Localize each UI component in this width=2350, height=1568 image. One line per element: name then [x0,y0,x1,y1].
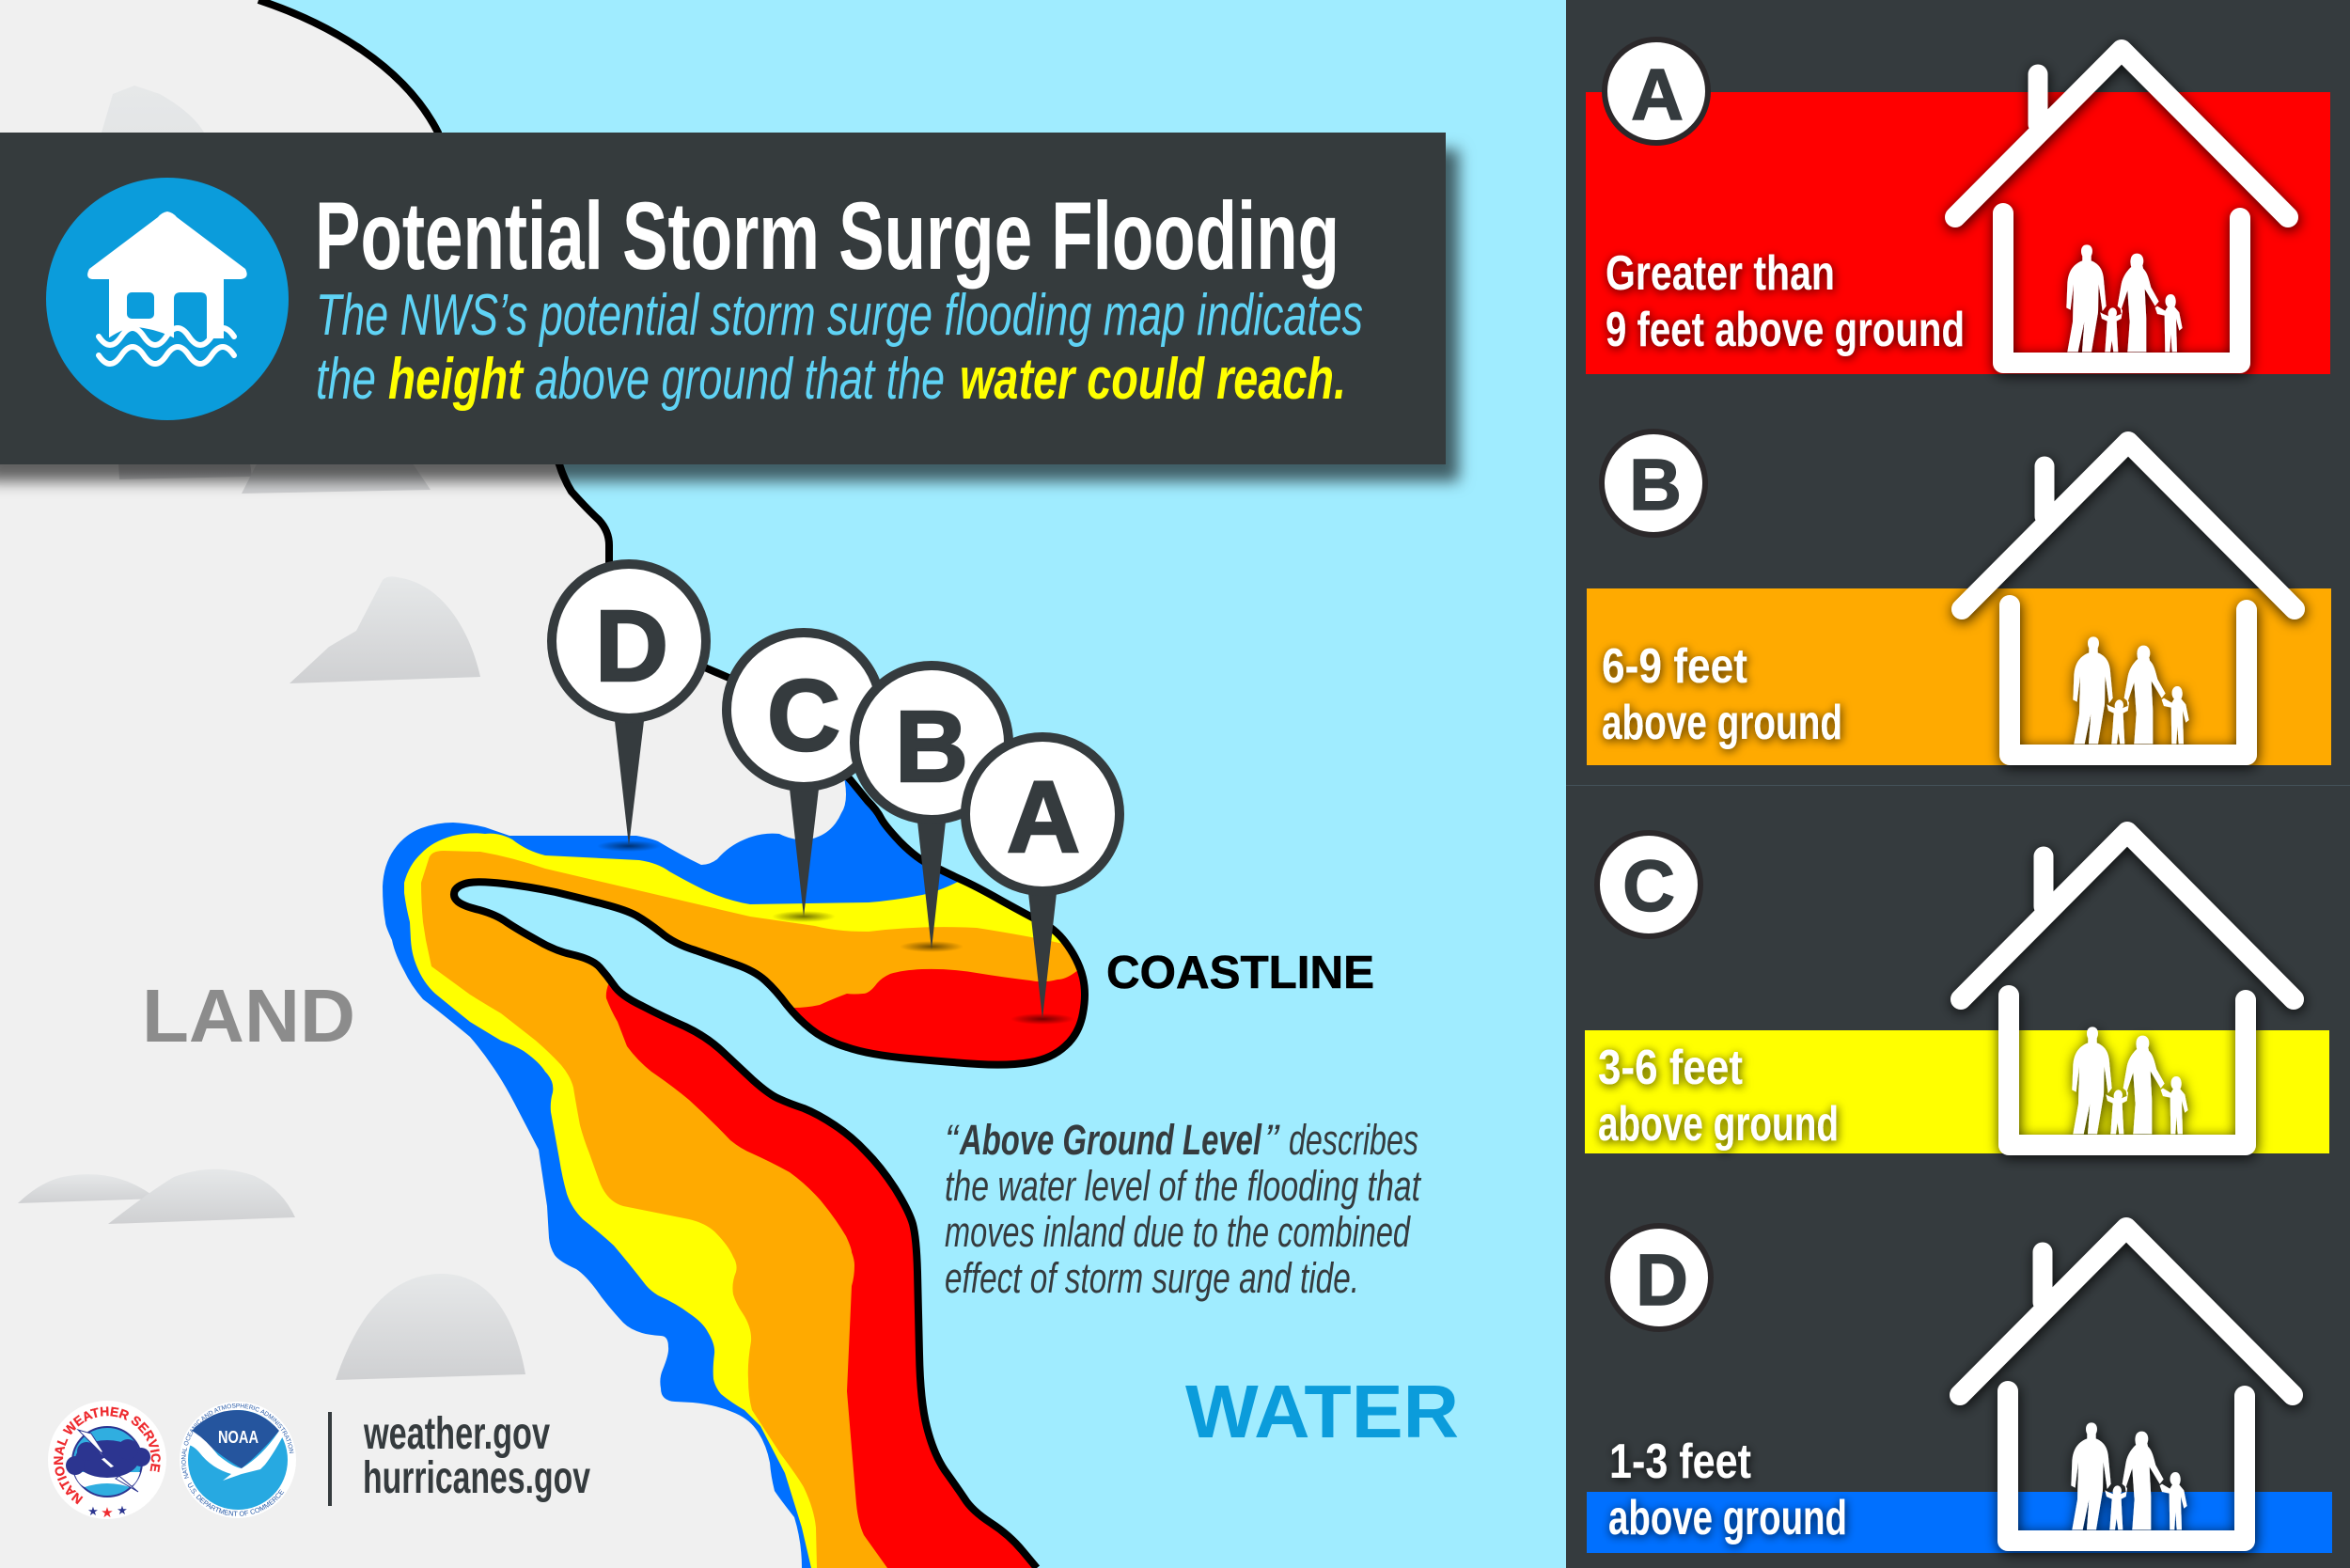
logo: NOAA: NATIONAL OCEANIC AND ATMOSPHERIC ADMINISTRATION [181,1403,293,1479]
legend D: 1-3 feet: 1-3 feet [1609,1435,1751,1489]
zone A: red lower band [605,983,1032,1568]
hills on land [18,86,525,1380]
text block: above ground level explanation: effect of storm surge and tide. [945,1254,1359,1302]
website links [328,1409,590,1506]
legend C: 3-6 feet [1585,832,2329,1153]
legend A: greater than 9 feet: 9 feet above ground [1606,303,1965,357]
website links: weather.gov [363,1409,550,1459]
subtitle text: height [388,347,525,412]
water background [0,0,1570,1568]
map pin D: D [595,588,668,702]
legend B: 6-9 feet: above ground [1602,696,1842,750]
label: WATER: WATER [1185,1370,1459,1453]
text block: above ground level explanation [945,1116,1422,1302]
legend panel background [1566,0,2350,1568]
text block: above ground level explanation: the water level of the flooding that [945,1162,1422,1210]
zone C: yellow 3-6 feet [404,833,1062,1568]
title banner [0,133,1446,464]
land [0,0,1085,1568]
legend C: 3-6 feet: above ground [1598,1097,1839,1152]
legend C: 3-6 feet: C [1622,846,1675,927]
website links: hurricanes.gov [363,1453,590,1503]
logo: NOAA [180,1402,296,1518]
map pin A [965,737,1120,1025]
label: COASTLINE: COASTLINE [1106,948,1374,998]
zone B: orange 6-9 feet [421,851,1077,1568]
subtitle text: above ground that the [535,347,945,412]
label: LAND: LAND [142,974,355,1058]
logo: National Weather Service: ★ [101,1504,114,1521]
text block: above ground level explanation: Above Ground Level [959,1116,1262,1164]
logo: National Weather Service: NATIONAL WEATHER SERVICE [54,1406,161,1504]
legend A: greater than 9 feet [1586,39,2330,374]
title heading: Potential Storm Surge Flooding [315,182,1340,290]
zone A: red upper lobe [793,968,1081,1061]
legend D: 1-3 feet [1587,1226,2332,1553]
text block: above ground level explanation: describes [1289,1116,1418,1164]
map pin C: C [767,658,840,772]
map pin D [552,564,706,852]
legend B: 6-9 feet: 6-9 feet [1602,639,1747,694]
legend B: 6-9 feet [1587,431,2331,765]
legend C: 3-6 feet: 3-6 feet [1598,1041,1743,1095]
text block: above ground level explanation: ” [1264,1116,1280,1164]
logo: National Weather Service: ★ [117,1504,128,1518]
map pin B: B [895,689,968,803]
legend A: greater than 9 feet: Greater than [1606,246,1835,301]
logo: NOAA: NOAA [218,1428,258,1447]
text block: above ground level explanation: “ [945,1116,960,1164]
logo: NOAA: U.S. DEPARTMENT OF COMMERCE [188,1482,284,1516]
map pin A: A [1007,760,1080,873]
surge flooding zones [383,780,1081,1568]
text block: above ground level explanation: moves inland due to the combined [945,1208,1411,1256]
map pin C [727,633,881,922]
legend A: greater than 9 feet: A [1631,55,1684,135]
icon: flooded house [46,178,289,420]
legend D: 1-3 feet: D [1636,1240,1688,1321]
logo: National Weather Service: ★ [87,1505,99,1519]
legend B: 6-9 feet: B [1629,445,1682,525]
zone D: blue 1-3 feet [383,780,958,1568]
subtitle text: water could reach. [960,347,1346,412]
subtitle text: the [316,347,376,412]
subtitle text: The NWS’s potential storm surge flooding map indicates [316,283,1363,348]
subtitle text [316,283,1363,412]
map pin B [854,666,1009,952]
coastline outline [258,0,1085,1568]
legend D: 1-3 feet: above ground [1608,1491,1847,1545]
